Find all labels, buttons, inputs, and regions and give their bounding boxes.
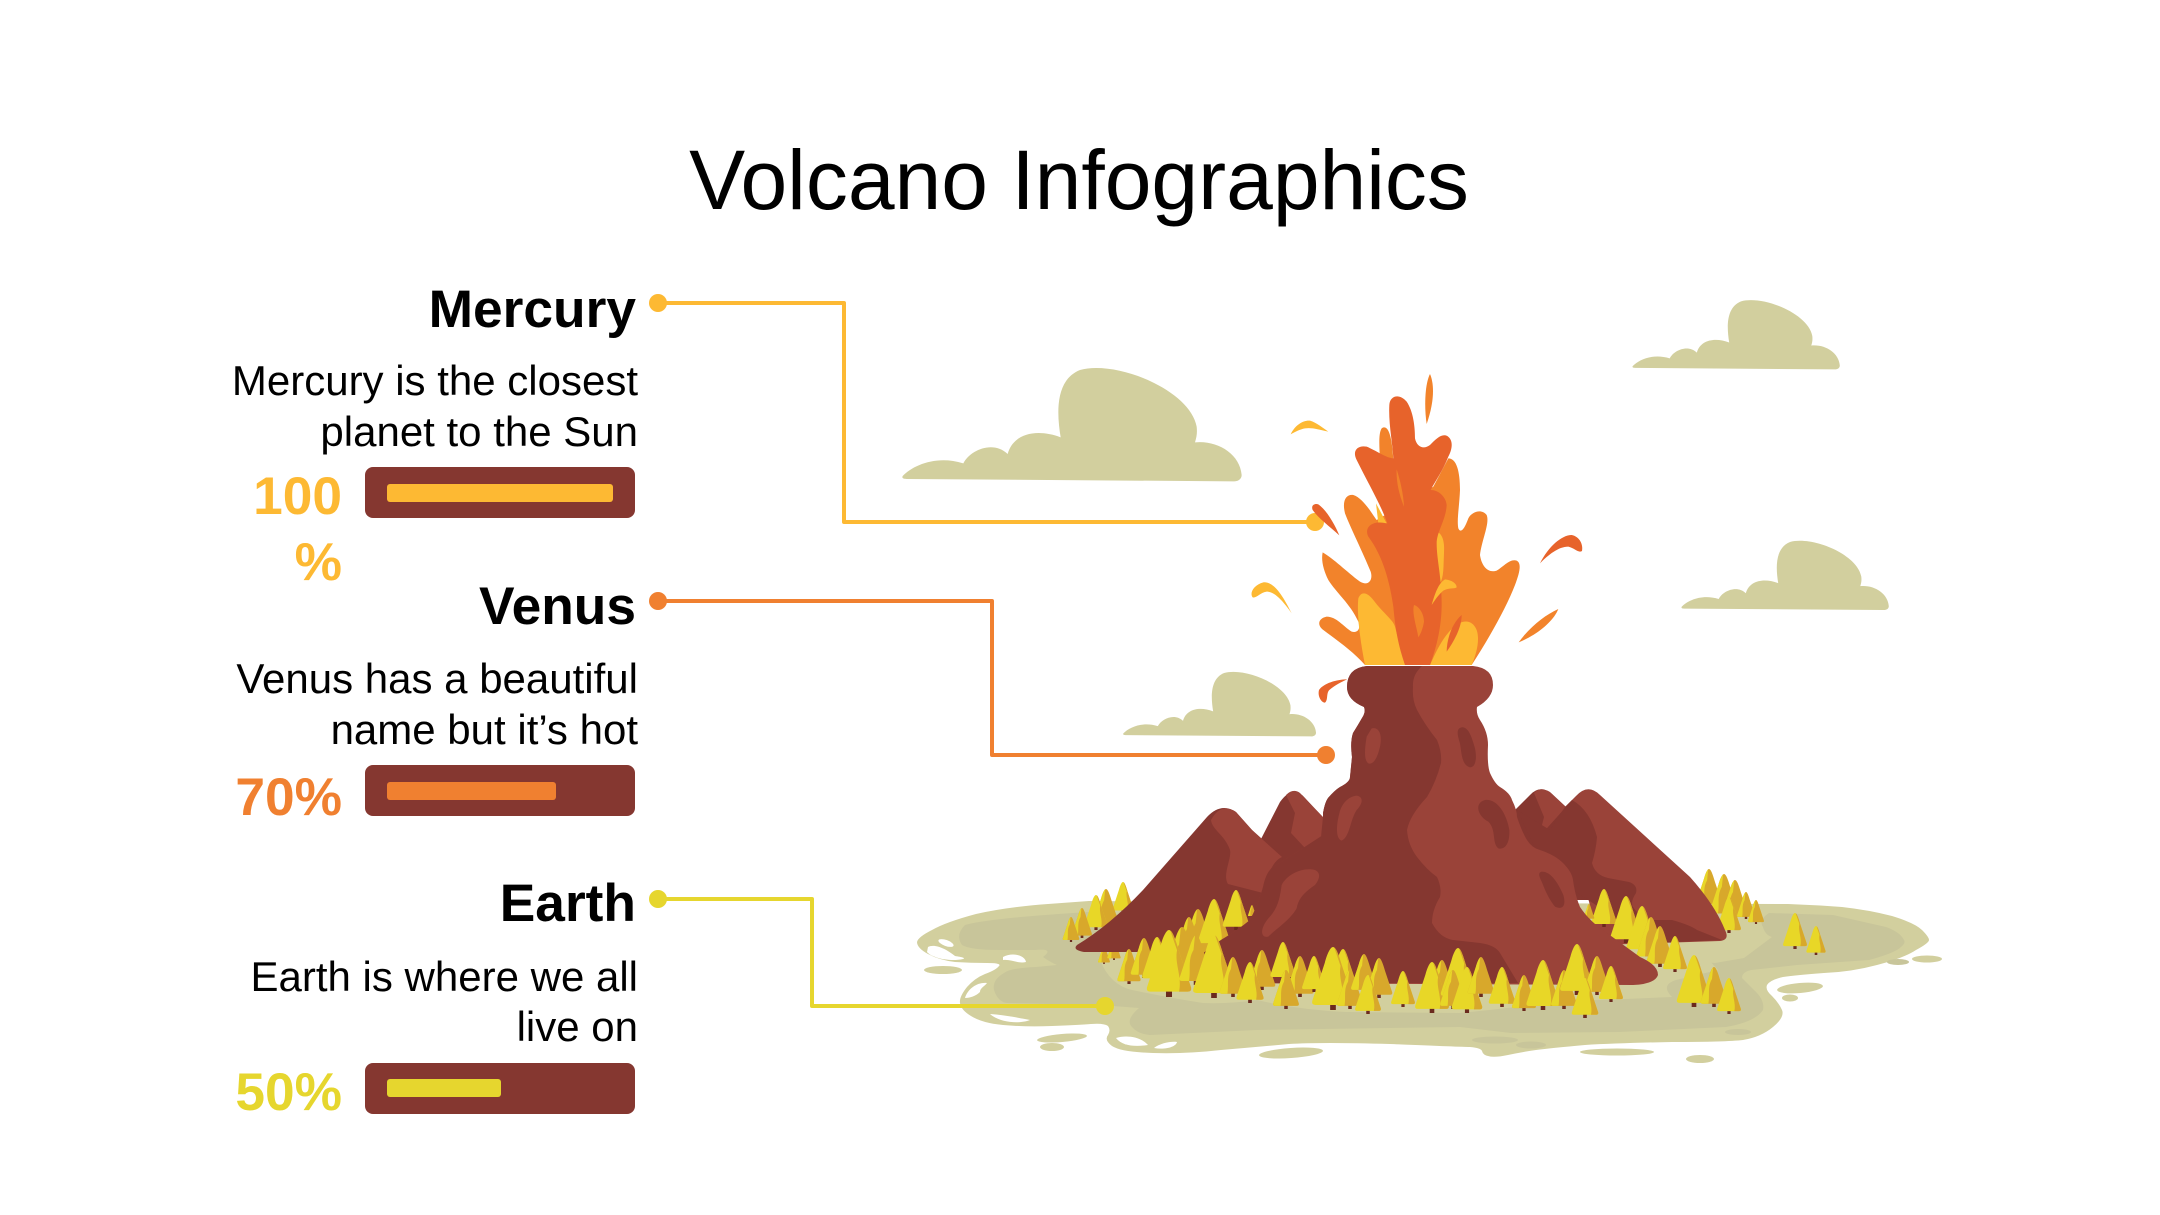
- small islets: [924, 956, 1942, 1063]
- trees behind mountains: [1063, 869, 1764, 964]
- percentage: 100%: 100: [253, 467, 342, 526]
- panel: Mercury: [232, 280, 638, 592]
- lava drop: right orange: [1519, 609, 1558, 642]
- text: Mercury description: Mercury is the closest: [232, 357, 638, 404]
- lava drop: right red: [1540, 535, 1582, 563]
- text: Earth description: live on: [517, 1003, 638, 1050]
- cloud: large left: [902, 368, 1242, 481]
- progress bar: Venus: [365, 765, 635, 816]
- panel: Earth: [235, 874, 638, 1122]
- progress bar: Earth: [365, 1063, 635, 1114]
- text: Venus description: Venus has a beautiful: [236, 655, 638, 702]
- connector: Mercury: [649, 294, 1324, 531]
- flame highlights: [1397, 469, 1404, 507]
- heading: Earth: Earth: [500, 874, 636, 933]
- illustration: volcano: [1063, 374, 1826, 1018]
- text: Mercury description: planet to the Sun: [320, 408, 638, 455]
- land shadow spots: [1472, 959, 1909, 1048]
- heading: Mercury: Mercury: [429, 280, 636, 339]
- connector: Venus: [649, 592, 1335, 764]
- flame: back orange: [1379, 427, 1397, 517]
- volcano cone: [1189, 666, 1658, 985]
- lava drop: upper left: [1291, 421, 1328, 434]
- white water holes: [927, 937, 1177, 1049]
- title: Volcano Infographics: [689, 133, 1469, 227]
- flames: [1252, 374, 1582, 703]
- text: Venus description: name but it’s hot: [331, 706, 638, 753]
- clouds: [902, 300, 1889, 736]
- percentage: 100%: %: [295, 533, 342, 592]
- lava drop: top: [1425, 374, 1433, 424]
- lava drop: rim: [1319, 679, 1347, 703]
- mountain: front right: [1517, 789, 1727, 945]
- trees between mountains and cone: [1176, 889, 1687, 972]
- text: Earth description: Earth is where we all: [250, 953, 638, 1000]
- lava drop: left yellow: [1252, 582, 1292, 613]
- cone surface blobs: [1262, 727, 1564, 937]
- flame: deep orange core: [1355, 396, 1452, 665]
- percentage: 70%: 70%: [235, 768, 342, 827]
- cloud: small near crater: [1123, 672, 1316, 736]
- mountain: front left: [1076, 808, 1290, 952]
- lava drop: red near dot: [1312, 504, 1339, 535]
- percentage: 50%: 50%: [235, 1063, 342, 1122]
- flame: yellow inner: [1358, 593, 1405, 665]
- mountains: back: [1240, 789, 1590, 900]
- connector: Earth: [649, 890, 1114, 1015]
- panel: Venus: [235, 577, 638, 827]
- trees: foreground: [1117, 913, 1826, 1018]
- progress bar: Mercury: [365, 467, 635, 518]
- heading: Venus: Venus: [479, 577, 636, 636]
- cloud: top right: [1632, 300, 1840, 369]
- island land: [917, 901, 1942, 1063]
- cloud: middle right: [1681, 541, 1889, 610]
